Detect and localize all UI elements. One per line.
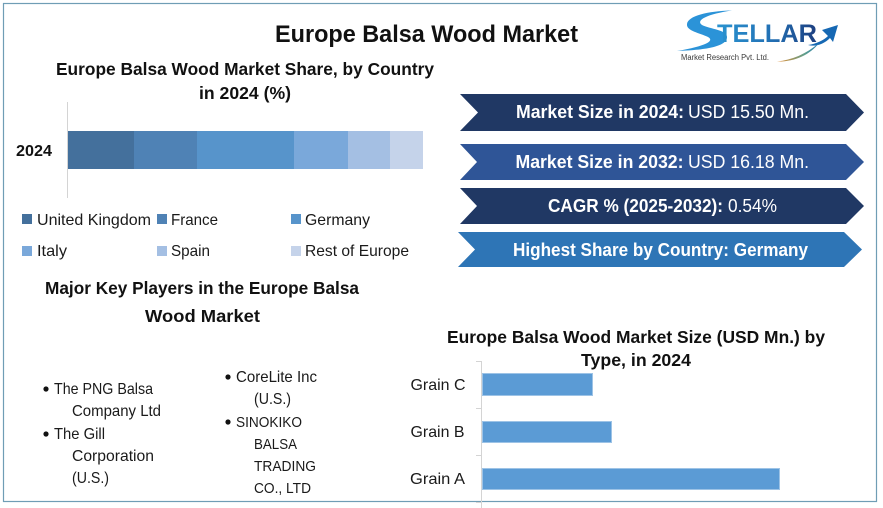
bar: Grain A: Grain A: [410, 471, 465, 488]
title: Europe Balsa Wood Market: [275, 21, 578, 48]
stacked bar chart: [16, 102, 423, 198]
key players list: column 1: [43, 381, 161, 487]
category label: 2024: [16, 143, 52, 160]
banner: highest share: [458, 232, 862, 267]
legend: [22, 212, 409, 260]
heading: share by country: Europe Balsa Wood Market Share, by Country: [56, 59, 434, 79]
legend: United Kingdom: [37, 212, 151, 229]
key players list: column 2: CO., LTD: [254, 480, 311, 497]
banner: market size 2024: [460, 94, 864, 131]
legend: Germany: [305, 212, 370, 229]
logo wordmark: TELLAR: [717, 20, 817, 48]
legend: Spain: [171, 243, 210, 260]
logo tagline: Market Research Pvt. Ltd.: [681, 53, 769, 62]
key players list: column 2: (U.S.): [254, 391, 291, 408]
key players list: column 2: CoreLite Inc: [236, 369, 317, 386]
logo: Stellar Market Research: [677, 10, 838, 62]
banner: market size 2032: [460, 144, 864, 180]
heading: major key players: Wood Market: [145, 306, 260, 326]
bar: Grain B: Grain B: [410, 424, 464, 441]
key players list: column 1: Company Ltd: [72, 403, 161, 420]
heading: market size by type: Europe Balsa Wood Market Size (USD Mn.) by: [447, 327, 825, 347]
bar: Grain B: [410, 422, 612, 442]
heading: share by country: in 2024 (%): [199, 83, 291, 103]
banner: market size 2032: USD 16.18 Mn.: [688, 152, 809, 172]
banner: market size 2024: Market Size in 2024:: [516, 102, 684, 122]
logo arrow: [808, 25, 838, 46]
heading: market size by type: Type, in 2024: [581, 350, 691, 370]
banner: CAGR: [460, 188, 864, 224]
legend: Italy: [37, 243, 67, 260]
banner: CAGR: 0.54%: [728, 196, 777, 216]
key players list: column 1: The Gill: [54, 426, 105, 443]
banner: market size 2032: Market Size in 2032:: [516, 152, 684, 172]
key players list: column 2: [225, 369, 317, 497]
legend: Rest of Europe: [305, 243, 409, 260]
heading: market size by type: [447, 327, 825, 370]
heading: major key players: [45, 278, 359, 326]
key players list: column 1: Corporation: [72, 448, 154, 465]
bar: Grain C: [410, 374, 592, 396]
key players list: column 2: TRADING: [254, 458, 316, 475]
key players list: column 1: (U.S.): [72, 470, 109, 487]
key players list: column 2: BALSA: [254, 436, 297, 453]
banner: market size 2024: USD 15.50 Mn.: [688, 102, 809, 122]
heading: major key players: Major Key Players in the Europe Balsa: [45, 278, 359, 298]
banner: CAGR: CAGR % (2025-2032):: [548, 196, 723, 216]
bar: Grain C: Grain C: [410, 377, 466, 394]
logo S swoosh: [677, 10, 732, 51]
key players list: column 1: The PNG Balsa: [54, 381, 153, 398]
horizontal bar chart by type: [410, 361, 780, 508]
bar: Grain A: [410, 468, 780, 490]
logo orange swoosh: [777, 43, 819, 62]
legend: France: [171, 212, 218, 229]
key players list: column 2: SINOKIKO: [236, 414, 302, 431]
banner: highest share: Highest Share by Country: Germany: [513, 240, 808, 260]
heading: share by country: [56, 59, 434, 103]
